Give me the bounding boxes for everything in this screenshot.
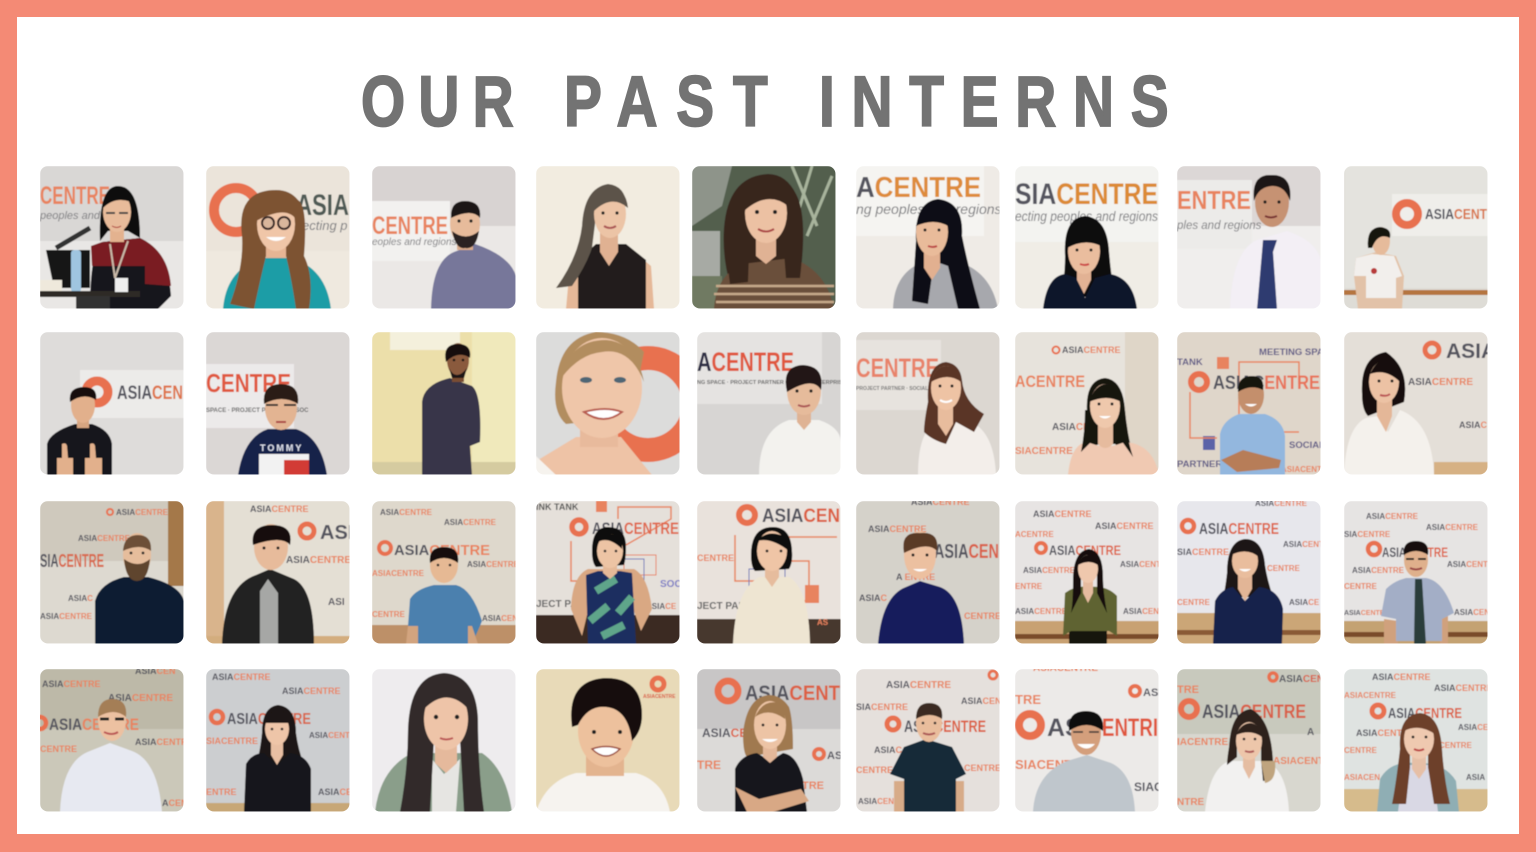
photo: intern in black tee with folded arms: ASIACENT: [745, 682, 840, 705]
photo: intern in black tee with folded arms: AS: [827, 750, 842, 762]
title: INTERNS: [819, 62, 1185, 141]
photo: intern with long brown hair: ASIACENTRE: [1344, 691, 1397, 700]
photo: intern in peach top: ASIACENTRE: [1062, 345, 1121, 355]
photo: intern in black jacket: [206, 501, 350, 644]
photo: intern in olive blouse: ASIACENTRE: [1120, 560, 1173, 569]
photo: intern with long brown hair: ASIA: [1466, 773, 1485, 782]
photo: intern in blue shirt: ASIACENTRE: [394, 542, 490, 559]
photo: intern with long brown hair: CENTRE: [1439, 741, 1473, 750]
photo: intern with glasses and tie: ASIACENTRE: [1447, 560, 1500, 569]
photo: intern with glasses and tie: CENTRE: [1344, 582, 1378, 591]
photo: intern in navy blouse: CENTRE: [1267, 564, 1301, 573]
photo: intern in blue shirt: ASIACENTRE: [444, 518, 497, 527]
photo: intern with glasses and tie: ASIACENTRE: [1366, 512, 1419, 521]
photo: intern with crossed arms: ASIACENT: [1281, 465, 1322, 474]
photo: intern in dark polo: ASIACEN: [961, 696, 1002, 706]
photo: intern at podium: peoples and reg: [39, 210, 120, 222]
photo: intern in black vest: [536, 166, 680, 309]
photo: intern in dark polo: ASIACENTRE: [904, 717, 986, 736]
photo: intern in white shirt with glasses: ASIACENTRE: [42, 679, 101, 689]
photo: intern in navy blouse: ASIACENTRE: [1255, 499, 1308, 508]
photo: smiling intern in collarless shirt: ASIACENTRE: [1033, 663, 1098, 674]
photo: intern in peach top: ASIACEN: [1052, 422, 1097, 433]
photo: intern in white shirt and tie: ples and regions: [1176, 220, 1262, 232]
photo: intern with dark top: SIACENTRE: [1015, 178, 1158, 211]
photo: intern in dark polo: CENTRE: [964, 763, 1001, 773]
photo: bearded intern in navy shirt: ASIACENTRE: [40, 612, 93, 621]
photo: intern in white shirt with ombre hair: TRE: [1177, 684, 1199, 696]
photo: intern in white blouse, red logo: [697, 332, 846, 475]
photo: intern in leaf-print dress: SOCI: [660, 579, 685, 590]
photo: intern with long black hair, grey shirt: ACENTRE: [856, 172, 981, 204]
photo: intern in checked shirt: eoples and regions: [372, 237, 457, 248]
photo: intern in navy shirt, grey wall: ASIACENTRE: [911, 497, 970, 507]
photo: intern in white tee by wall logo: ASIACENT: [1425, 206, 1487, 223]
photo: intern in white shirt with ombre hair: ASIACEN: [1279, 674, 1324, 685]
photo: intern in white shirt and tie: ENTRE: [1177, 185, 1251, 215]
photo: intern in navy shirt, grey wall: ASIACENTRE: [868, 524, 927, 534]
photo: intern in white blouse, wall logo: [1344, 332, 1496, 475]
photo: intern in black tee with folded arms: [697, 669, 842, 812]
photo: intern with long brown hair: CENTRE: [1344, 746, 1378, 755]
photo: intern in black jacket: ASI: [328, 597, 345, 608]
photo: intern with glasses and tie: ASIACENT: [1454, 608, 1495, 617]
photo: intern with crossed arms: TANK: [1177, 357, 1203, 368]
photo: intern in black jacket: ASIACENTRE: [286, 555, 351, 566]
photo: intern in checked shirt: CENTRE: [372, 212, 448, 240]
photo: intern in navy blouse: [1177, 499, 1324, 644]
photo: intern in black top, fringe: [206, 669, 352, 812]
photo: intern in Tommy sweater: SPACE · PROJECT PARTNER · SOC: [206, 408, 309, 414]
photo: intern in olive blouse: ASIACENTRE: [1015, 607, 1068, 616]
photo: intern in navy shirt, grey wall: [856, 497, 1001, 644]
photo: intern in white blouse, wall logo: ASIAC: [1459, 420, 1488, 430]
photo: intern in striped sweater outdoors: [692, 166, 836, 309]
photo: intern in black top, fringe: SIACENTRE: [206, 736, 258, 746]
photo: intern with glasses and tie: ASIACENTRE: [1426, 523, 1479, 532]
photo: intern in olive blouse: [1015, 501, 1173, 644]
photo: intern with brown wavy hair: [856, 332, 1000, 475]
photo: intern with long black hair, grey shirt: ng peoples and regions: [856, 201, 1002, 217]
photo: intern in cream shirt: JECT PAI: [697, 601, 741, 612]
photo: intern in white shirt with ombre hair: NTRE: [1177, 797, 1205, 808]
photo: intern in dark polo: ASIACENTRE: [886, 680, 951, 691]
photo: intern with crossed arms: SOCIAL: [1289, 440, 1325, 451]
photo: intern with glasses and tie: ASIACENTRE: [1352, 566, 1405, 575]
photo: smiling intern in collarless shirt: AS: [1047, 714, 1082, 742]
photo: intern in cream shirt: ASIACEN: [762, 506, 840, 527]
photo: intern with brown wavy hair: CENTRE: [856, 353, 939, 383]
photo: intern at podium: [39, 166, 184, 309]
photo: intern in white blouse, red logo: NG SPACE · PROJECT PARTNER · SOCIAL ENTERPRISE: [697, 380, 846, 386]
photo: intern in white blouse, red logo: ACENTRE: [697, 347, 794, 377]
photo: intern with long brown hair: ASIACEN: [1344, 773, 1380, 782]
title: OUR: [361, 62, 527, 141]
photo: intern in teal shirt: [206, 166, 350, 309]
photo: intern in dark polo: [856, 669, 1002, 812]
photo: bearded intern in navy shirt: ASIACENTRE: [116, 508, 169, 517]
photo: intern in black tee with folded arms: TRE: [697, 758, 721, 772]
photo: intern in leaf-print dress: ASIACE: [646, 602, 677, 611]
photo: intern with glasses and tie: [1344, 501, 1500, 644]
photo: intern in blue shirt: ASIACENT: [482, 614, 523, 623]
photo: intern in blue shirt: ASIACENTRE: [467, 560, 520, 569]
photo: intern in olive blouse: ASIACENTRE: [1095, 521, 1154, 531]
photo: intern in peach top: [1015, 332, 1159, 475]
photo: intern in navy blouse: ASIACENT: [1283, 540, 1324, 549]
photo: intern in white shirt with ombre hair: [1177, 669, 1332, 812]
photo: intern with long brown hair: ASIACENTRE: [1388, 705, 1462, 722]
photo: intern in dark polo: CENTRE: [856, 765, 893, 775]
photo: intern in teal shirt: ecting p: [302, 218, 348, 233]
photo: intern in white shirt with glasses: ASIACENTRE: [135, 737, 194, 747]
photo: intern in olive blouse: ENTRE: [1015, 582, 1043, 591]
photo: intern in white tee by wall logo: [1344, 166, 1488, 309]
photo: smiling intern in collarless shirt: ENTRI: [1102, 714, 1158, 742]
photo: intern in leaf-print dress: ASIACENTRE: [592, 519, 679, 538]
photo: intern with crossed arms: PARTNER: [1177, 459, 1222, 470]
photo: close-up of smiling intern with short hair: ASIACENTRE: [643, 694, 676, 700]
photo: intern in navy blouse: ASIACENTRE: [1199, 521, 1279, 538]
photo: intern in black tee with folded arms: TRE: [802, 780, 824, 792]
photo: intern in olive blouse: ACENTRE: [1015, 530, 1054, 539]
photo: intern in blue shirt: CENTRE: [372, 610, 406, 619]
photo: intern in black jacket: ASIACENTRE: [250, 504, 309, 514]
photo: intern in navy shirt, grey wall: CENTRE: [964, 611, 1001, 621]
photo: intern with long brown hair: ASIACENTRE: [1356, 728, 1415, 738]
title: PAST: [564, 62, 786, 141]
photo: intern with dark top: [1015, 166, 1159, 309]
photo: intern in white shirt with glasses: ASIACENTRE: [49, 715, 139, 734]
photo: intern with long brown hair: ASIACENTRE: [1434, 683, 1493, 693]
photo: intern against yellow wall: [372, 332, 516, 475]
photo: intern in black top, fringe: ASIACENTRE: [212, 672, 271, 682]
photo: intern in leaf-print dress: INK TANK: [536, 502, 579, 512]
photo: intern in olive blouse: ASIACENTRE: [1023, 566, 1076, 575]
photo: intern in olive blouse: ASIACENTRE: [1049, 542, 1121, 558]
photo: intern in leaf-print dress: [536, 501, 685, 644]
photo: intern in white shirt with ombre hair: ASIACENTR: [1273, 756, 1332, 767]
photo: intern in cream shirt: [697, 501, 841, 644]
photo: intern in white shirt with ombre hair: IACENTRE: [1177, 737, 1228, 748]
photo: intern with crossed arms: ASIACENTRE: [1213, 373, 1320, 394]
photo: intern in peach top: SIACENTRE: [1015, 446, 1073, 457]
photo: intern with long brown hair: [1344, 669, 1493, 812]
photo: intern in olive blouse: ASIACENT: [1123, 607, 1164, 616]
photo: intern with long brown hair: ASIACE: [1458, 723, 1489, 732]
photo: intern in navy shirt, grey wall: ASIAC: [859, 593, 888, 603]
photo: smiling intern in collarless shirt: SIAC: [1134, 780, 1163, 794]
photo: intern in navy shirt, grey wall: A ENTRE: [896, 572, 935, 582]
photo: intern with long brown hair: ASIACENTRE: [1372, 672, 1431, 682]
photo: intern with crossed arms: MEETING SPAC: [1259, 347, 1331, 358]
photo: intern at podium: CENTRE: [40, 182, 110, 210]
photo: intern in Tommy sweater: [206, 332, 350, 475]
photo: bearded intern in navy shirt: ASIACENTRE: [78, 534, 131, 543]
photo: intern with glasses and tie: ASIACENTRE: [1382, 544, 1448, 560]
photo: close-up of smiling intern: [536, 332, 694, 475]
photo: intern in black top, fringe: ASIACENTRE: [282, 686, 341, 696]
photo: intern in white shirt with ombre hair: ASIACENTRE: [1202, 702, 1306, 723]
photo: intern in dark polo: SIACENTRE: [856, 702, 908, 712]
photo: intern in black top, fringe: ENTRE: [206, 787, 237, 797]
photo: bearded intern in navy shirt: [40, 501, 184, 644]
photo: intern with glasses and tie: ASIACENTRE: [1344, 610, 1390, 617]
photo: intern in white shirt with glasses: CENTRE: [40, 744, 77, 754]
photo: intern in navy shirt, grey wall: ASIACEN: [934, 541, 999, 563]
photo: intern in checked shirt: [372, 166, 516, 309]
photo: intern with brown wavy hair: PROJECT PARTNER · SOCIAL ENTERPRISE: [856, 386, 962, 392]
photo: intern in white shirt and tie: [1176, 166, 1321, 309]
photo: intern in olive blouse: ASIACENTRE: [1033, 509, 1092, 519]
photo: smiling intern in collarless shirt: [1015, 663, 1163, 812]
photo: bearded intern in navy shirt: ASIAC: [68, 594, 93, 603]
photo: intern in dark polo: ASIAC: [874, 745, 903, 755]
photo: intern with dark top: ecting peoples and regions: [1015, 208, 1158, 224]
title: [361, 62, 1185, 141]
photo: intern in white shirt with glasses: ASIACENTRE: [108, 693, 173, 704]
photo: intern in black top, fringe: ASIACENTRE: [227, 711, 311, 728]
photo: intern in white blouse, wall logo: ASIACENTRE: [1408, 377, 1473, 388]
photo: intern in black tee with folded arms: ASIACE: [702, 726, 747, 740]
photo: intern in Tommy sweater: TOMMY: [260, 443, 303, 453]
photo: intern in black jacket: ASIA: [320, 522, 368, 544]
photo: intern in white shirt with glasses: ASIACEN: [135, 666, 176, 676]
photo: intern in Tommy sweater: CENTRE: [206, 368, 291, 398]
photo: intern in white blouse, wall logo: ASIA: [1446, 340, 1496, 363]
photo: close-up of intern with long hair: [372, 669, 516, 812]
photo: intern in white shirt with glasses: [40, 669, 184, 812]
photo: intern in black top, fringe: ASIACE: [318, 787, 352, 797]
photo: intern giving thumbs up: ASIACEN: [117, 383, 183, 404]
photo: intern in leaf-print dress: JECT PAF: [536, 599, 584, 610]
photo: intern in navy blouse: CENTRE: [1177, 598, 1211, 607]
photo: intern in blue shirt: [372, 501, 523, 644]
photo: close-up of smiling intern with short hair: [536, 669, 680, 812]
photo: intern in dark polo: ASIACENT: [858, 797, 899, 806]
photo: bearded intern in navy shirt: SIACENTRE: [40, 551, 104, 571]
photo: intern giving thumbs up: [40, 332, 184, 475]
photo: intern with glasses and tie: SIACENTRE: [1344, 530, 1391, 539]
photo: intern in blue shirt: ASIACENTRE: [372, 569, 425, 578]
photo: smiling intern in collarless shirt: ASI: [1143, 687, 1161, 699]
photo: intern in black top, fringe: ASIACENT: [309, 731, 350, 740]
photo: intern in cream shirt: AS: [817, 618, 829, 627]
photo: intern in blue shirt: ASIACENTRE: [380, 508, 433, 517]
photo: intern in white shirt with ombre hair: A: [1307, 727, 1314, 738]
photo: intern with crossed arms: [1177, 332, 1331, 475]
photo: intern in teal shirt: ASIA: [296, 189, 349, 222]
photo: intern with long black hair, grey shirt: [856, 166, 1002, 309]
photo grid: [34, 166, 1500, 812]
photo: intern in navy blouse: ASIACE: [1289, 598, 1320, 607]
photo: smiling intern in collarless shirt: SIACENT: [1015, 757, 1072, 772]
photo: intern in white shirt with glasses: ACEN: [162, 798, 188, 808]
photo: intern in peach top: ACENTRE: [1015, 372, 1085, 391]
photo: intern in cream shirt: CENTRE: [697, 553, 734, 563]
photo: intern in navy blouse: SIACENTRE: [1177, 547, 1229, 557]
photo: smiling intern in collarless shirt: TRE: [1015, 692, 1041, 707]
